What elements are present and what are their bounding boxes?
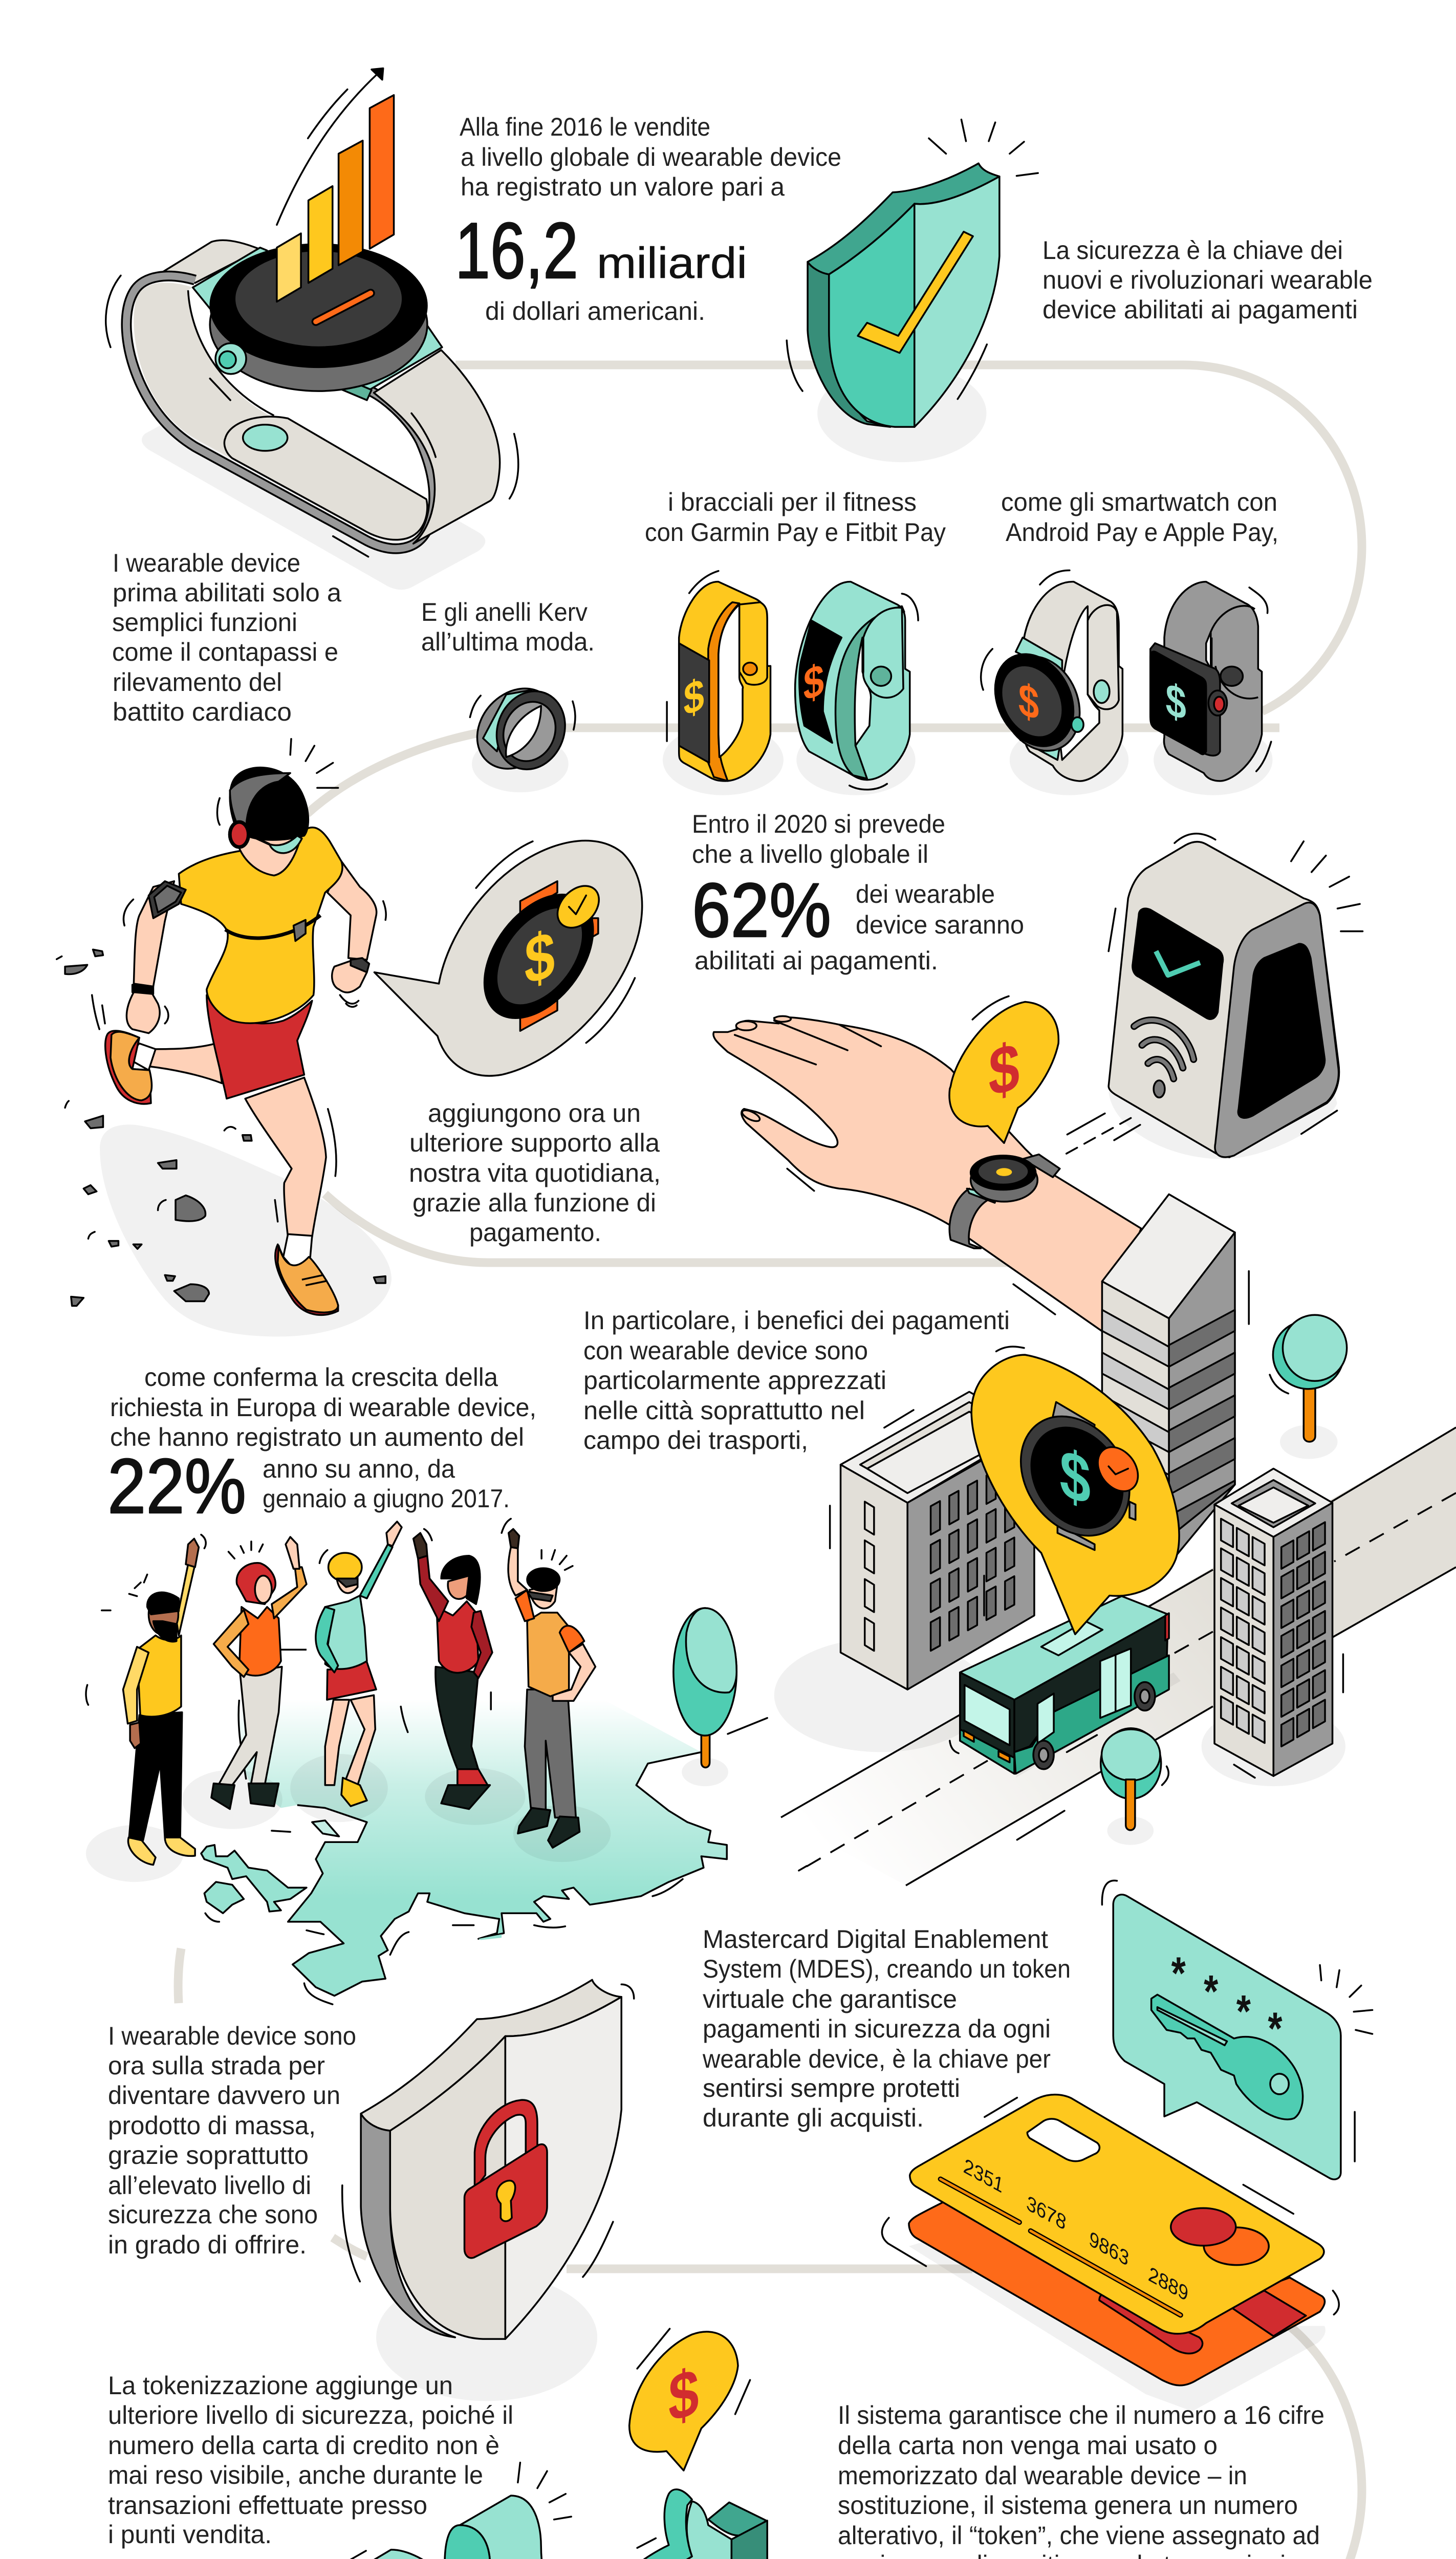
text: fitness bands: [645, 488, 946, 547]
text: mass-market product: grazie soprattutto: [108, 2141, 309, 2170]
illustration: round smartwatch with beige band: $: [1018, 673, 1039, 730]
illustration: square smartwatch with gray band: $: [1166, 673, 1186, 730]
text: benefits in cities: particolarmente apprezzati: [583, 1366, 886, 1395]
text: benefits in cities: campo dei trasporti,: [583, 1426, 808, 1455]
text: Mastercard MDES: virtuale che garantisce: [703, 1985, 957, 2013]
text: mass-market product: sicurezza che sono: [108, 2200, 318, 2229]
road with dashed centre line: [781, 1427, 1456, 1885]
text: Mastercard MDES: [702, 1925, 1071, 2132]
illustration: yellow fitness band: $: [684, 668, 704, 726]
text: fitness bands: i bracciali per il fitness: [668, 488, 917, 516]
illustration: small thumbs-up right with dollar bubble: $: [668, 2353, 699, 2437]
text: tokenization: transazioni effettuate presso: [108, 2491, 427, 2520]
text: Mastercard MDES: sentirsi sempre protetti: [703, 2074, 960, 2102]
illustration: stacked credit cards: 3678: [1027, 2189, 1066, 2236]
text: global sales 2016: ha registrato un valore pari a: [461, 172, 785, 201]
text: daily support: pagamento.: [469, 1218, 601, 1247]
illustration: key in speech bubble: [1102, 1880, 1373, 2179]
text: 16-digit number: alterativo, il “token”, che viene assegnato ad: [838, 2521, 1320, 2550]
illustration: mint fitness band: [795, 582, 918, 795]
illustration: round smartwatch with beige band: [980, 570, 1128, 795]
illustration: smart ring: [466, 674, 577, 792]
tall striped tower: [1102, 1194, 1235, 1564]
text: daily support: grazie alla funzione di: [412, 1188, 656, 1217]
illustration: city with towers and location bubble: [728, 1194, 1347, 1799]
illustration: key in speech bubble: *: [1268, 2003, 1283, 2054]
illustration: hand with watch and dollar bubble: $: [989, 1029, 1019, 1111]
text: mass-market product: diventare davvero un: [108, 2081, 340, 2110]
text: mass-market product: prodotto di massa,: [108, 2111, 316, 2140]
illustration: square smartwatch with gray band: [1150, 582, 1272, 795]
text: global sales 2016: [455, 113, 841, 326]
illustration: map of Europe: [86, 1650, 727, 2004]
text: forecast 62 percent: device saranno: [856, 910, 1024, 939]
illustration: mint fitness band: $: [803, 653, 824, 711]
text: Europe growth 22 percent: gennaio a giugno 2017.: [263, 1484, 510, 1513]
illustration: stacked credit cards: 9863: [1089, 2225, 1128, 2271]
person 3: [316, 1522, 402, 1806]
text: Mastercard MDES: pagamenti in sicurezza da ogni: [703, 2014, 1051, 2043]
connecting path rail: [123, 365, 1362, 2559]
text: Kerv rings: all’ultima moda.: [421, 627, 595, 656]
text: mass-market product: [108, 2022, 356, 2259]
text: daily support: aggiungono ora un: [428, 1099, 641, 1127]
illustration: yellow fitness band: [663, 571, 784, 795]
text: Mastercard MDES: Mastercard Digital Enablement: [703, 1925, 1048, 1954]
illustration: tree near the map: [673, 1608, 736, 1786]
text: smartwatches: come gli smartwatch con: [1001, 488, 1277, 516]
text: tokenization: numero della carta di credito non è: [108, 2431, 499, 2460]
illustration: big thumbs-up with smartwatch: [326, 2463, 690, 2559]
illustration: group of five people celebrating: [86, 1519, 595, 1865]
text: Kerv rings: [421, 598, 595, 656]
bus: [960, 1596, 1181, 1777]
illustration: shield with padlock: [342, 1980, 634, 2401]
text: mass-market product: ora sulla strada per: [108, 2051, 325, 2080]
text: earlier wearable functions: [112, 549, 341, 726]
text: earlier wearable functions: I wearable device: [113, 549, 300, 577]
text: Mastercard MDES: System (MDES), creando un token: [703, 1955, 1071, 1983]
person 5: [508, 1529, 595, 1848]
text: fitness bands: con Garmin Pay e Fitbit Pay: [645, 518, 946, 547]
illustration: key in speech bubble: *: [1171, 1948, 1186, 1999]
text: Kerv rings: E gli anelli Kerv: [421, 598, 588, 626]
text: Europe growth 22 percent: come conferma la crescita della: [144, 1363, 498, 1392]
illustration: stacked credit cards: 2889: [1148, 2261, 1188, 2307]
text: benefits in cities: con wearable device sono: [583, 1336, 868, 1365]
illustration: key in speech bubble: *: [1204, 1966, 1219, 2017]
text: Europe growth 22 percent: [107, 1363, 536, 1530]
text: Europe growth 22 percent: che hanno registrato un aumento del: [110, 1423, 524, 1451]
text: forecast 62 percent: abilitati ai pagamenti.: [694, 946, 938, 975]
text: daily support: ulteriore supporto alla: [409, 1129, 660, 1157]
location bubble with watch: $: [1060, 1434, 1091, 1521]
text: mass-market product: in grado di offrire.: [108, 2230, 307, 2259]
text: smartwatches: Android Pay e Apple Pay,: [1006, 518, 1278, 547]
text: security: nuovi e rivoluzionari wearable: [1042, 266, 1373, 294]
text: Europe growth 22 percent: 22%: [107, 1443, 246, 1530]
text: forecast 62 percent: dei wearable: [856, 880, 995, 908]
illustration: hand with watch and dollar bubble: [713, 996, 1141, 1331]
text: mass-market product: I wearable device sono: [108, 2022, 356, 2050]
text: 16-digit number: della carta non venga mai usato o: [838, 2431, 1218, 2460]
person 4: [414, 1533, 492, 1809]
text: tokenization: mai reso visibile, anche durante le: [108, 2461, 483, 2489]
person 2: [211, 1537, 307, 1809]
location bubble with watch: [971, 1355, 1179, 1634]
text: Mastercard MDES: durante gli acquisti.: [703, 2103, 924, 2132]
text: earlier wearable functions: prima abilitati solo a: [113, 578, 341, 607]
text: forecast 62 percent: [692, 810, 1024, 975]
text: earlier wearable functions: semplici funzioni: [112, 608, 297, 637]
tree trunk beside the road: [799, 1780, 1154, 1871]
illustration: small thumbs-up right with dollar bubble: [619, 2329, 783, 2559]
text: 16-digit number: memorizzato dal wearable device – in: [838, 2461, 1247, 2490]
illustration: stacked credit cards: [882, 2095, 1339, 2411]
text: forecast 62 percent: 62%: [692, 867, 831, 953]
left office building: [841, 1392, 1034, 1689]
text: forecast 62 percent: Entro il 2020 si prevede: [692, 810, 945, 838]
text: benefits in cities: [583, 1306, 1010, 1455]
text: Europe growth 22 percent: richiesta in Europa di wearable device,: [110, 1393, 536, 1422]
text: tokenization: i punti vendita.: [108, 2520, 272, 2549]
text: tokenization: La tokenizzazione aggiunge un: [108, 2371, 453, 2400]
text: 16-digit number: sostituzione, il sistema genera un numero: [838, 2491, 1298, 2520]
illustration: running figure wearing devices: [57, 739, 392, 1337]
text: earlier wearable functions: come il contapassi e: [112, 638, 338, 666]
text: tokenization: [108, 2371, 513, 2549]
text: security: [1042, 236, 1373, 324]
text: security: La sicurezza è la chiave dei: [1042, 236, 1343, 265]
round trees: [1101, 1315, 1347, 1799]
text: 16-digit number: [838, 2401, 1324, 2559]
text: global sales 2016: miliardi: [597, 239, 747, 288]
text: benefits in cities: nelle città soprattutto nel: [583, 1396, 865, 1425]
speech bubble: watch with dollar: $: [525, 916, 555, 999]
corner tower: [1214, 1469, 1333, 1776]
text: daily support: [409, 1099, 661, 1247]
text: global sales 2016: Alla fine 2016 le vendite: [460, 113, 710, 141]
text: mass-market product: all’elevato livello di: [108, 2171, 311, 2200]
illustration: big smartwatch with growth bars: [106, 68, 518, 590]
person 1: [123, 1538, 199, 1865]
illustration: contactless payment terminal: [1060, 834, 1363, 1159]
text: security: device abilitati ai pagamenti: [1042, 295, 1358, 324]
text: smartwatches: [1001, 488, 1278, 547]
text: global sales 2016: a livello globale di wearable device: [461, 143, 841, 171]
illustration: stacked credit cards: 2351: [963, 2153, 1003, 2198]
text: earlier wearable functions: battito cardiaco: [113, 698, 292, 726]
text: Europe growth 22 percent: anno su anno, da: [263, 1455, 455, 1483]
text: forecast 62 percent: che a livello globale il: [692, 840, 928, 869]
text: earlier wearable functions: rilevamento del: [113, 668, 282, 697]
text: global sales 2016: 16,2: [455, 206, 578, 295]
illustration: key in speech bubble: *: [1236, 1986, 1251, 2037]
text: global sales 2016: di dollari americani.: [485, 297, 705, 326]
text: daily support: nostra vita quotidiana,: [409, 1159, 661, 1187]
text: Mastercard MDES: wearable device, è la chiave per: [702, 2045, 1051, 2073]
text: benefits in cities: In particolare, i benefici dei pagamenti: [583, 1306, 1010, 1335]
illustration: teal shield with check: [787, 120, 1038, 462]
text: 16-digit number: Il sistema garantisce che il numero a 16 cifre: [838, 2401, 1324, 2430]
text: tokenization: ulteriore livello di sicurezza, poiché il: [108, 2401, 513, 2430]
speech bubble: watch with dollar: [374, 840, 642, 1076]
